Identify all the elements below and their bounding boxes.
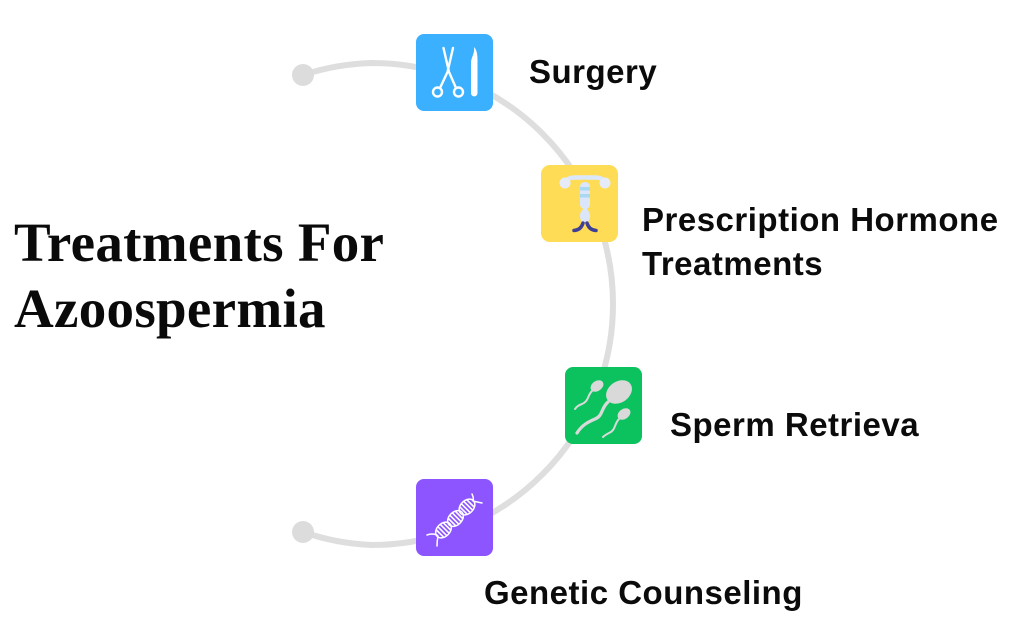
- label: prescription hormone treatments: Treatments: [642, 245, 823, 282]
- title: [14, 212, 384, 339]
- label: prescription hormone treatments: [642, 201, 999, 282]
- title: Azoospermia: [14, 278, 326, 339]
- label: sperm retrieval: Sperm Retrieva: [670, 406, 919, 443]
- label: genetic counseling: Genetic Counseling: [484, 574, 803, 611]
- title: Treatments For: [14, 212, 384, 273]
- label: surgery: Surgery: [529, 53, 657, 90]
- label: prescription hormone treatments: Prescription Hormone: [642, 201, 999, 238]
